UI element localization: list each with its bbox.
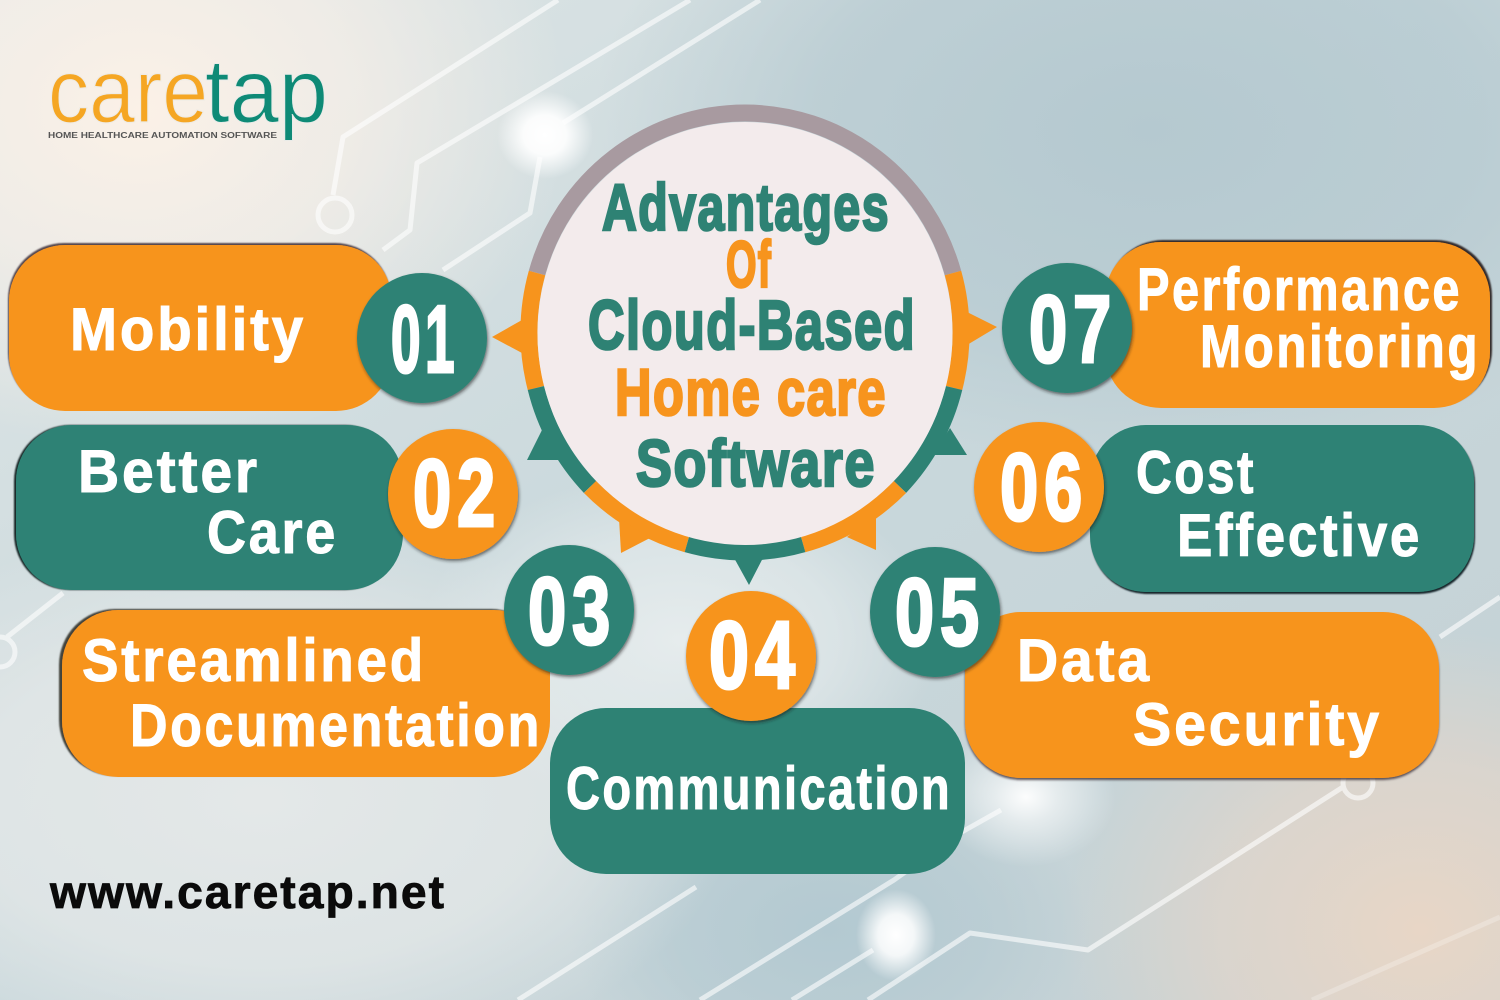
item 01: Mobility: 01	[391, 286, 459, 393]
title	[588, 170, 916, 500]
item 07: Performance Monitoring: 07	[1029, 276, 1117, 383]
item 01: Mobility: Mobility	[70, 296, 306, 363]
item 05: Data Security: Security	[1133, 691, 1382, 758]
logo: caretap: care	[48, 42, 208, 142]
item 02: Better Care	[16, 425, 518, 590]
item 06: Cost Effective	[974, 422, 1474, 592]
item 03: Streamlined Documentation	[62, 545, 634, 777]
item 03: Streamlined Documentation: 03	[528, 558, 616, 665]
item 06: Cost Effective: Effective	[1177, 502, 1422, 569]
item 03: Streamlined Documentation: Documentation	[130, 692, 542, 759]
title: Advantages	[602, 170, 890, 244]
item 03: Streamlined Documentation: Streamlined	[82, 627, 426, 694]
title: Home care	[615, 355, 887, 429]
item 05: Data Security: Data	[1017, 627, 1152, 694]
item 05: Data Security	[870, 547, 1439, 778]
title: Of	[726, 227, 772, 301]
logo: caretap	[48, 42, 328, 142]
item 04: Communication: Communication	[566, 755, 952, 822]
item 02: Better Care: Care	[207, 499, 338, 566]
logo: caretap: tap	[205, 42, 328, 142]
item 01: Mobility	[9, 245, 487, 411]
central badge	[492, 113, 997, 585]
title: Software	[636, 426, 876, 500]
item 06: Cost Effective: 06	[1000, 434, 1088, 541]
item 05: Data Security: 05	[895, 559, 985, 666]
item 07: Performance Monitoring	[1002, 242, 1490, 408]
item 06: Cost Effective: Cost	[1136, 439, 1256, 506]
title: Cloud-Based	[588, 286, 916, 364]
item 02: Better Care: Better	[78, 438, 260, 505]
item 04: Communication	[550, 591, 965, 874]
item 04: Communication: 04	[709, 602, 801, 709]
ring segments and pointers	[529, 113, 961, 552]
logo: caretap: HOME HEALTHCARE AUTOMATION SOFTWARE	[48, 131, 278, 140]
website url: www.caretap.net	[49, 866, 446, 918]
item 02: Better Care: 02	[413, 440, 501, 547]
